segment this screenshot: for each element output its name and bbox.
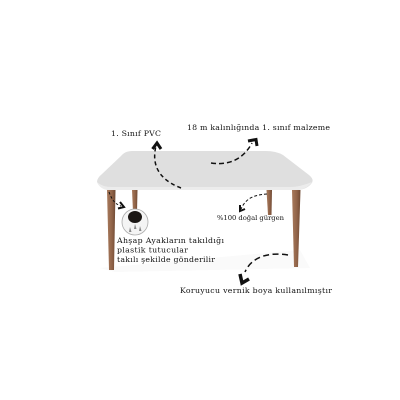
front left leg xyxy=(107,190,116,270)
floor shadow xyxy=(100,250,310,272)
label: natural wood: %100 doğal gürgen xyxy=(217,214,285,222)
back left leg xyxy=(132,190,138,212)
label: material: 18 m kalınlığında 1. sınıf malzeme xyxy=(187,123,330,132)
label: varnish: Koruyucu vernik boya kullanılmıştır xyxy=(180,286,332,295)
table top front edge xyxy=(97,182,312,190)
table top xyxy=(97,151,313,190)
front right leg xyxy=(292,190,300,267)
label: plastic holders xyxy=(116,236,224,264)
arrow: natural wood xyxy=(240,194,267,211)
arrow: varnish xyxy=(240,254,288,283)
label: plastic holders: plastik tutucular xyxy=(117,246,188,254)
label: plastic holders: Ahşap Ayakların takıldığı xyxy=(116,236,224,245)
label: plastic holders: takılı şekilde gönderilir xyxy=(117,255,215,264)
arrow: PVC xyxy=(152,143,181,188)
arrow: plastic holder xyxy=(109,192,124,208)
back right leg xyxy=(266,190,272,215)
icon: plastic holder xyxy=(122,209,148,235)
label: PVC: 1. Sınıf PVC xyxy=(111,129,161,138)
arrow: material xyxy=(211,140,257,164)
